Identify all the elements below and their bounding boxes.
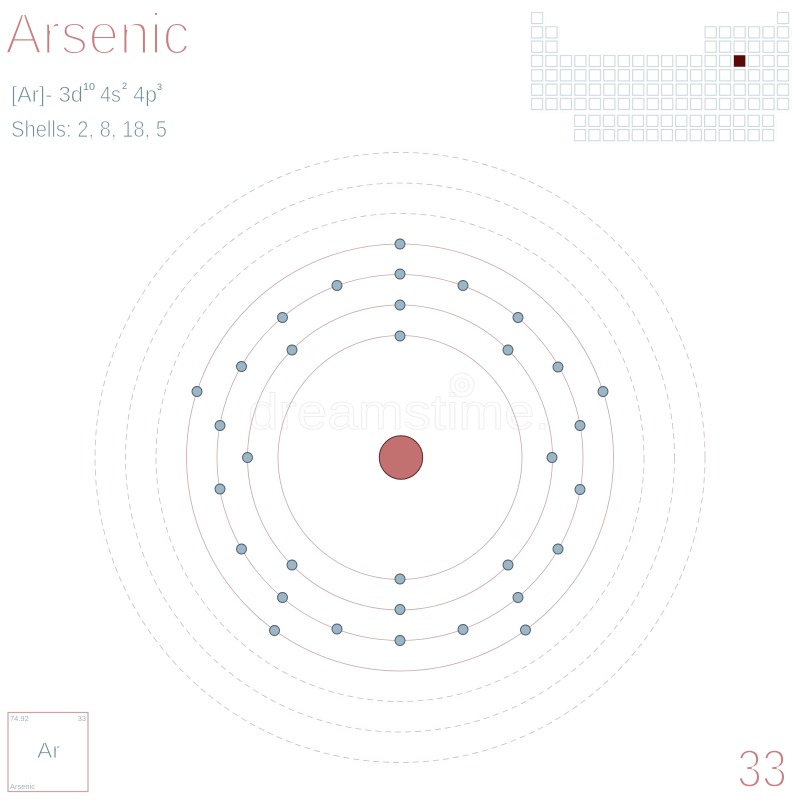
atomic mass: 74.92 xyxy=(10,714,29,723)
element name: Arsenic xyxy=(10,782,35,791)
element tile xyxy=(8,712,88,792)
electron configuration xyxy=(11,81,162,107)
electron configuration: 4p xyxy=(133,82,157,107)
electron configuration: [Ar]- 3d xyxy=(11,82,83,107)
nucleus xyxy=(379,436,423,479)
element symbol: Ar xyxy=(37,738,60,763)
dashed empty shells xyxy=(95,152,705,762)
title: Arsenic xyxy=(5,2,190,67)
shell 2 electrons xyxy=(242,300,557,614)
electron configuration: 3 xyxy=(157,82,162,92)
shell 3 electrons xyxy=(215,269,585,646)
electron shell orbits xyxy=(186,244,614,671)
periodic table locator xyxy=(531,12,791,143)
watermark: dreamstime. xyxy=(248,384,550,440)
electron configuration: 4s xyxy=(100,82,121,107)
shell 4 electrons xyxy=(192,239,608,636)
shell 1 electrons xyxy=(395,331,405,584)
electrons xyxy=(192,239,608,646)
electron configuration: 10 xyxy=(83,82,95,93)
atomic number: 33 xyxy=(78,714,86,723)
atomic number large: 33 xyxy=(737,739,787,799)
highlighted element: arsenic xyxy=(734,55,745,67)
shells text: Shells: 2, 8, 18, 5 xyxy=(11,116,167,142)
electron configuration: 2 xyxy=(122,81,127,91)
